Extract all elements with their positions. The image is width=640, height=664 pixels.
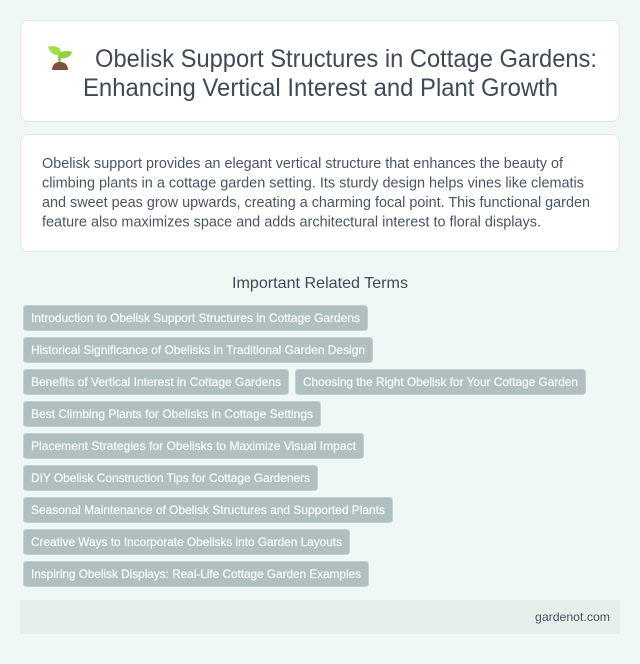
tag (24, 434, 364, 458)
tag: Placement Strategies for Obelisks to Maximize Visual Impact (31, 439, 357, 453)
tag list (24, 306, 586, 586)
title: Obelisk Support Structures in Cottage Gardens: (95, 45, 597, 73)
tag (24, 370, 288, 394)
tag: DIY Obelisk Construction Tips for Cottage Gardeners (31, 471, 310, 485)
tag: Historical Significance of Obelisks in Traditional Garden Design (31, 343, 365, 357)
description text: Obelisk support provides an elegant vertical structure that enhances the beauty of (42, 156, 564, 172)
icon: seedling (48, 46, 72, 70)
tag: Inspiring Obelisk Displays: Real-Life Cottage Garden Examples (31, 567, 361, 581)
tag: Introduction to Obelisk Support Structures in Cottage Gardens (31, 311, 360, 325)
description text (42, 156, 590, 230)
tag: Seasonal Maintenance of Obelisk Structures and Supported Plants (31, 503, 385, 517)
title (83, 45, 597, 102)
tag: Benefits of Vertical Interest in Cottage Gardens (31, 375, 281, 389)
title: Enhancing Vertical Interest and Plant Growth (83, 74, 558, 102)
footer: gardenot.com (535, 610, 610, 624)
tag (24, 402, 320, 426)
tag (24, 530, 350, 554)
tag: Creative Ways to Incorporate Obelisks into Garden Layouts (31, 535, 342, 549)
tag: Best Climbing Plants for Obelisks in Cottage Settings (31, 407, 313, 421)
tag (24, 338, 372, 362)
footer (20, 600, 620, 634)
description text: climbing plants in a cottage garden setting. Its sturdy design helps vines like clematis (42, 176, 584, 192)
tag (24, 498, 392, 522)
panel: description (20, 134, 620, 252)
description text: feature also maximizes space and adds architectural interest to floral displays. (42, 214, 541, 230)
description text: and sweet peas grow upwards, creating a charming focal point. This functional garden (42, 195, 590, 211)
header card (20, 20, 620, 122)
heading: related terms: Important Related Terms (232, 275, 408, 292)
tag: Choosing the Right Obelisk for Your Cottage Garden (303, 375, 578, 389)
tag (296, 370, 586, 394)
tag (24, 306, 368, 330)
tag (24, 562, 368, 586)
tag (24, 466, 318, 490)
